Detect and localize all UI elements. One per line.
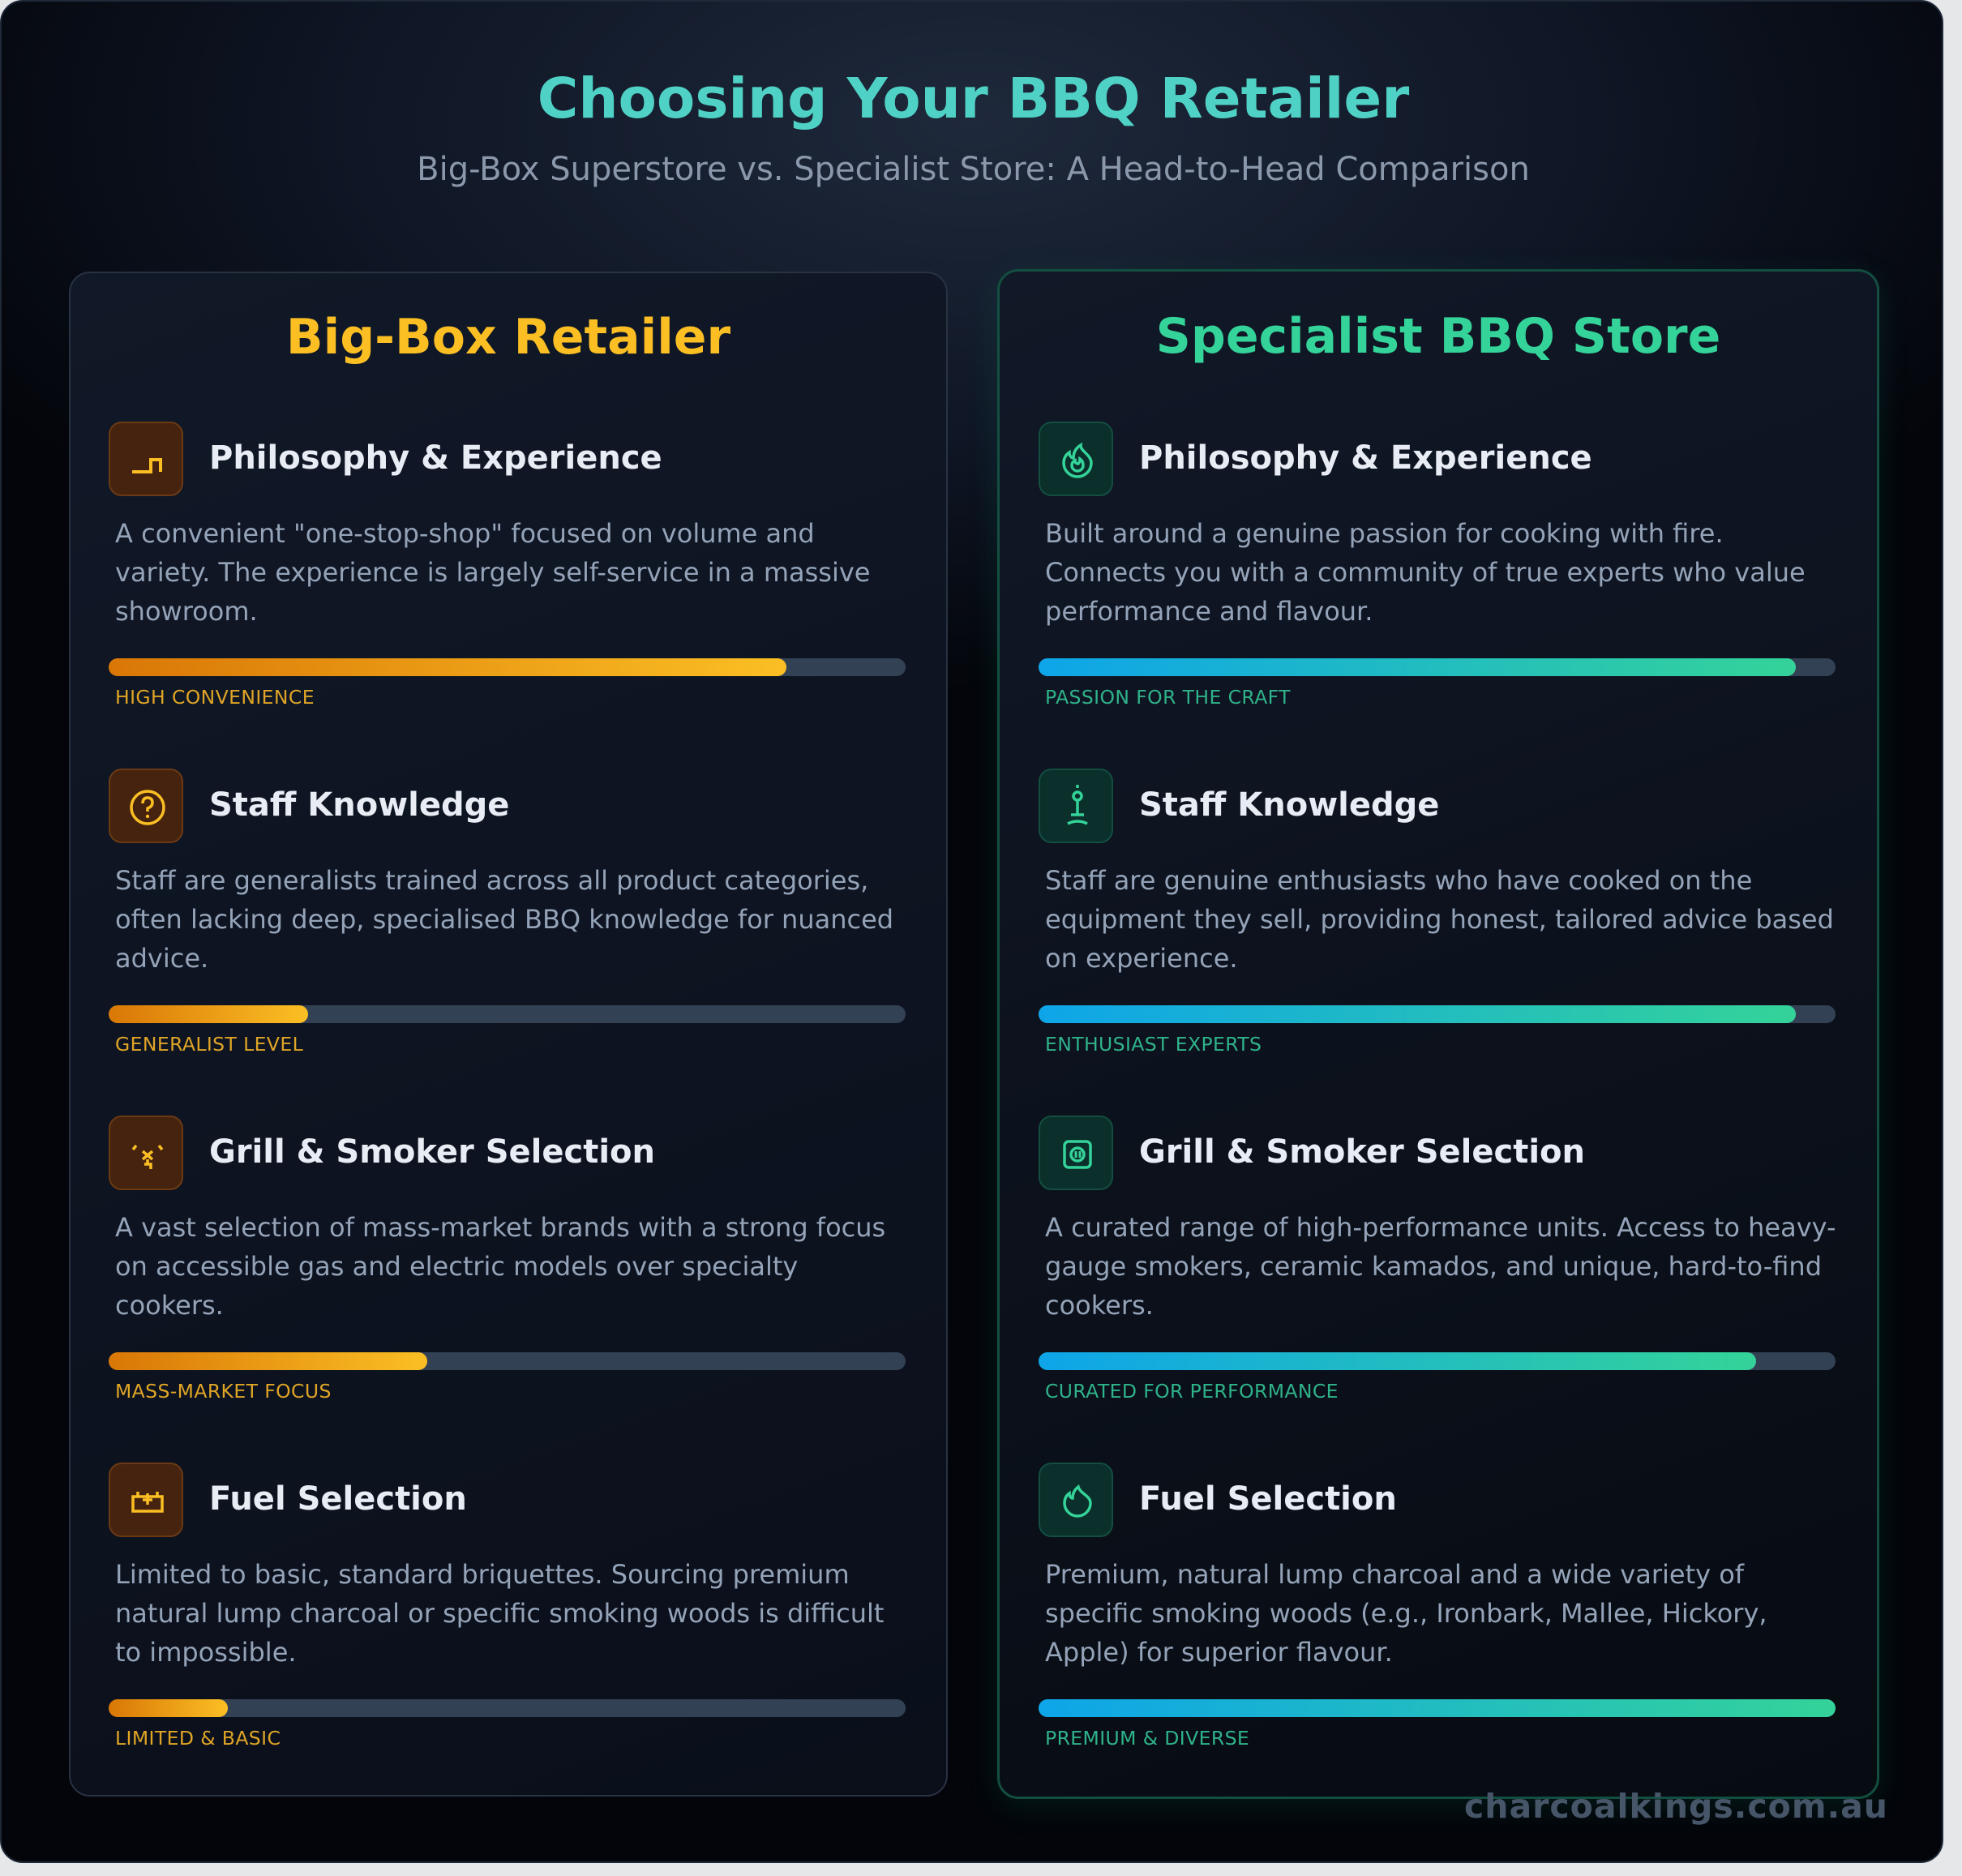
body text: on accessible gas and electric models over specialty — [115, 1251, 798, 1282]
section: fuel (specialist) — [1039, 1463, 1836, 1750]
bar: enthusiast — [1039, 1005, 1836, 1023]
label: PASSION FOR THE CRAFT — [1045, 686, 1291, 709]
body text: Connects you with a community of true experts who value — [1045, 557, 1806, 588]
section: staff (big-box) — [109, 769, 906, 1056]
bar: passion — [1039, 658, 1836, 676]
icon: flame outline — [1039, 1463, 1113, 1537]
title: Choosing Your BBQ Retailer — [538, 66, 1409, 131]
body text: A curated range of high-performance units. Access to heavy- — [1045, 1212, 1836, 1243]
bar: curated — [1039, 1352, 1836, 1370]
body text: variety. The experience is largely self-service in a massive — [115, 557, 870, 588]
body text — [115, 1559, 884, 1668]
body text: gauge smokers, ceramic kamados, and unique, hard-to-find — [1045, 1251, 1822, 1282]
body text — [1045, 518, 1806, 627]
heading: Fuel Selection — [209, 1480, 467, 1518]
body text: Limited to basic, standard briquettes. Sourcing premium — [115, 1559, 850, 1590]
panel heading: big-box: Big-Box Retailer — [286, 309, 730, 366]
heading: Fuel Selection — [1139, 1480, 1397, 1518]
body text — [1045, 1559, 1767, 1668]
section: grill (big-box) — [109, 1116, 906, 1403]
label: GENERALIST LEVEL — [115, 1033, 303, 1056]
heading: Staff Knowledge — [209, 786, 509, 824]
label: HIGH CONVENIENCE — [115, 686, 315, 709]
section: staff (specialist) — [1039, 769, 1836, 1056]
label: LIMITED & BASIC — [115, 1727, 281, 1750]
label: ENTHUSIAST EXPERTS — [1045, 1033, 1262, 1056]
body text: cookers. — [115, 1290, 224, 1321]
icon: scatter — [109, 1116, 183, 1190]
body text — [115, 518, 870, 627]
body text: performance and flavour. — [1045, 596, 1373, 627]
panel heading: specialist: Specialist BBQ Store — [1156, 308, 1720, 365]
body text: Premium, natural lump charcoal and a wide variety of — [1045, 1559, 1744, 1590]
heading: Grill & Smoker Selection — [209, 1133, 655, 1171]
heading: Staff Knowledge — [1139, 786, 1439, 824]
body text — [1045, 865, 1834, 974]
body text: A vast selection of mass-market brands with a strong focus — [115, 1212, 885, 1243]
subtitle: Big-Box Superstore vs. Specialist Store: A Head-to-Head Comparison — [417, 151, 1530, 188]
body text: often lacking deep, specialised BBQ knowledge for nuanced — [115, 904, 893, 935]
bar: premium — [1039, 1699, 1836, 1717]
heading: Grill & Smoker Selection — [1139, 1133, 1585, 1171]
heading: Philosophy & Experience — [1139, 439, 1592, 477]
bar: mass market — [109, 1352, 906, 1370]
icon: steps — [109, 422, 183, 496]
body text: Built around a genuine passion for cooking with fire. — [1045, 518, 1724, 549]
section: philosophy (specialist) — [1039, 422, 1836, 709]
label: PREMIUM & DIVERSE — [1045, 1727, 1249, 1750]
bar: high convenience — [109, 658, 906, 676]
watermark: charcoalkings.com.au — [1464, 1787, 1888, 1826]
heading: Philosophy & Experience — [209, 439, 662, 477]
section: grill (specialist) — [1039, 1116, 1836, 1403]
body text: to impossible. — [115, 1637, 297, 1668]
icon: flame — [1039, 422, 1113, 496]
body text: Staff are generalists trained across all product categories, — [115, 865, 868, 896]
panel: specialist store — [997, 269, 1879, 1799]
bar: limited — [109, 1699, 906, 1717]
body text: Staff are genuine enthusiasts who have cooked on the — [1045, 865, 1752, 896]
body text: natural lump charcoal or specific smoking woods is difficult — [115, 1598, 884, 1629]
body text — [115, 865, 893, 974]
body text: specific smoking woods (e.g., Ironbark, Mallee, Hickory, — [1045, 1598, 1767, 1629]
section: fuel (big-box) — [109, 1463, 906, 1750]
body text — [115, 1212, 885, 1321]
body text: showroom. — [115, 596, 258, 627]
body text: advice. — [115, 943, 208, 974]
bar: generalist — [109, 1005, 906, 1023]
icon: question — [109, 769, 183, 843]
body text: cookers. — [1045, 1290, 1154, 1321]
label: CURATED FOR PERFORMANCE — [1045, 1380, 1339, 1403]
body text — [1045, 1212, 1836, 1321]
icon: thermometer — [1039, 769, 1113, 843]
panel: big-box retailer — [69, 272, 948, 1797]
body text: on experience. — [1045, 943, 1238, 974]
body text: A convenient "one-stop-shop" focused on volume and — [115, 518, 815, 549]
body text: Apple) for superior flavour. — [1045, 1637, 1393, 1668]
section: philosophy (big-box) — [109, 422, 906, 709]
label: MASS-MARKET FOCUS — [115, 1380, 332, 1403]
icon: basket — [109, 1463, 183, 1537]
icon: smoker — [1039, 1116, 1113, 1190]
body text: equipment they sell, providing honest, tailored advice based — [1045, 904, 1834, 935]
